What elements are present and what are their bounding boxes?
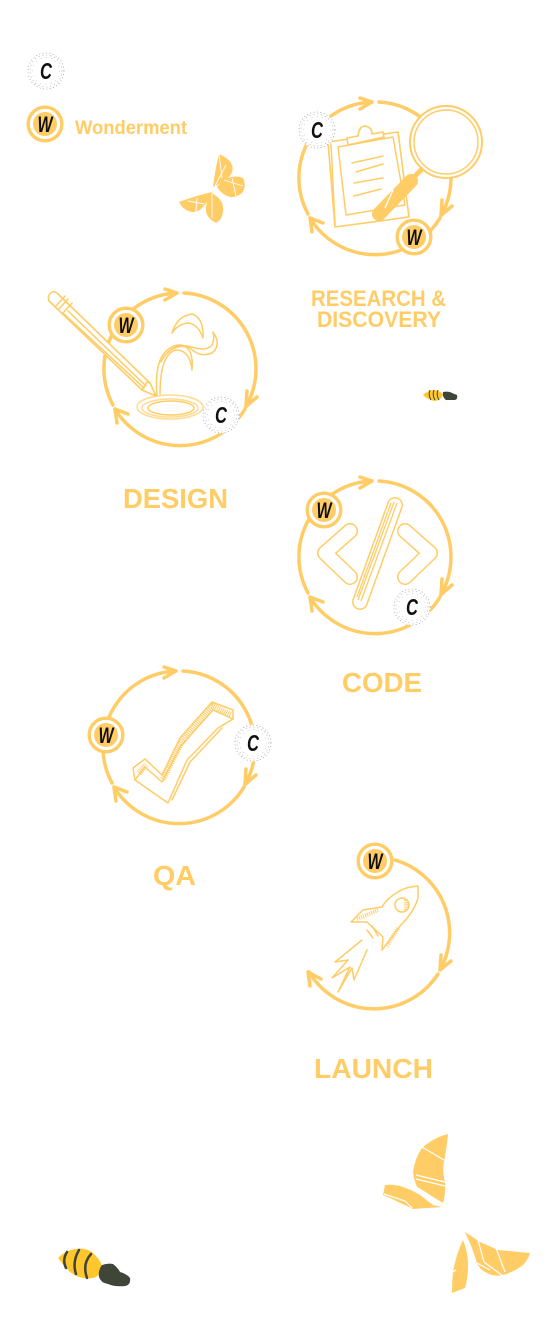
cycle ring [299, 98, 452, 255]
icon: code brackets [325, 502, 430, 602]
W badge [89, 718, 123, 752]
legend: C badge [28, 52, 64, 90]
icon: pencil [48, 292, 156, 396]
C badge: C [247, 731, 259, 757]
C badge: C [215, 403, 227, 429]
W badge [109, 308, 143, 342]
heading: CODE [342, 667, 422, 698]
legend: Wonderment badge and label: Wonderment [75, 118, 188, 139]
cycle ring [308, 860, 451, 1009]
step: QA [89, 667, 272, 891]
W badge: W [99, 725, 115, 749]
heading: RESEARCH & [311, 286, 446, 311]
step: design [48, 289, 257, 514]
butterfly: top [179, 154, 245, 223]
small bee [423, 390, 457, 401]
legend: Wonderment badge and label [28, 107, 188, 141]
step: launch [308, 844, 451, 1084]
W badge: W [317, 500, 333, 524]
legend: Wonderment badge and label: W [38, 114, 54, 138]
C badge [298, 112, 336, 148]
butterfly: bottom right upper [383, 1134, 448, 1209]
W badge: W [368, 851, 384, 875]
step: code [299, 477, 452, 698]
large bee [58, 1249, 130, 1286]
icon: magnifying glass [379, 106, 482, 214]
cycle ring [103, 667, 256, 824]
W badge [397, 220, 431, 254]
heading: QA [153, 860, 196, 891]
butterfly: bottom right lower [452, 1232, 530, 1293]
heading [311, 286, 446, 332]
W badge: W [407, 227, 423, 251]
heading: LAUNCH [314, 1053, 433, 1084]
W badge [358, 844, 392, 878]
heading: DISCOVERY [317, 307, 441, 332]
step: research and discovery [298, 98, 482, 332]
legend: C badge: C [40, 59, 52, 85]
cycle ring [299, 477, 452, 634]
W badge [307, 493, 341, 527]
heading: DESIGN [123, 483, 228, 514]
icon: check mark [133, 702, 233, 803]
icon: rocket [332, 886, 418, 992]
W badge: W [119, 315, 135, 339]
C badge: C [406, 595, 418, 621]
icon: clipboard [328, 126, 409, 227]
icon: swirl [137, 314, 217, 419]
C badge [202, 396, 240, 434]
C badge [234, 724, 272, 762]
C badge [394, 588, 430, 626]
C badge: C [311, 118, 323, 144]
cycle ring [104, 289, 257, 446]
